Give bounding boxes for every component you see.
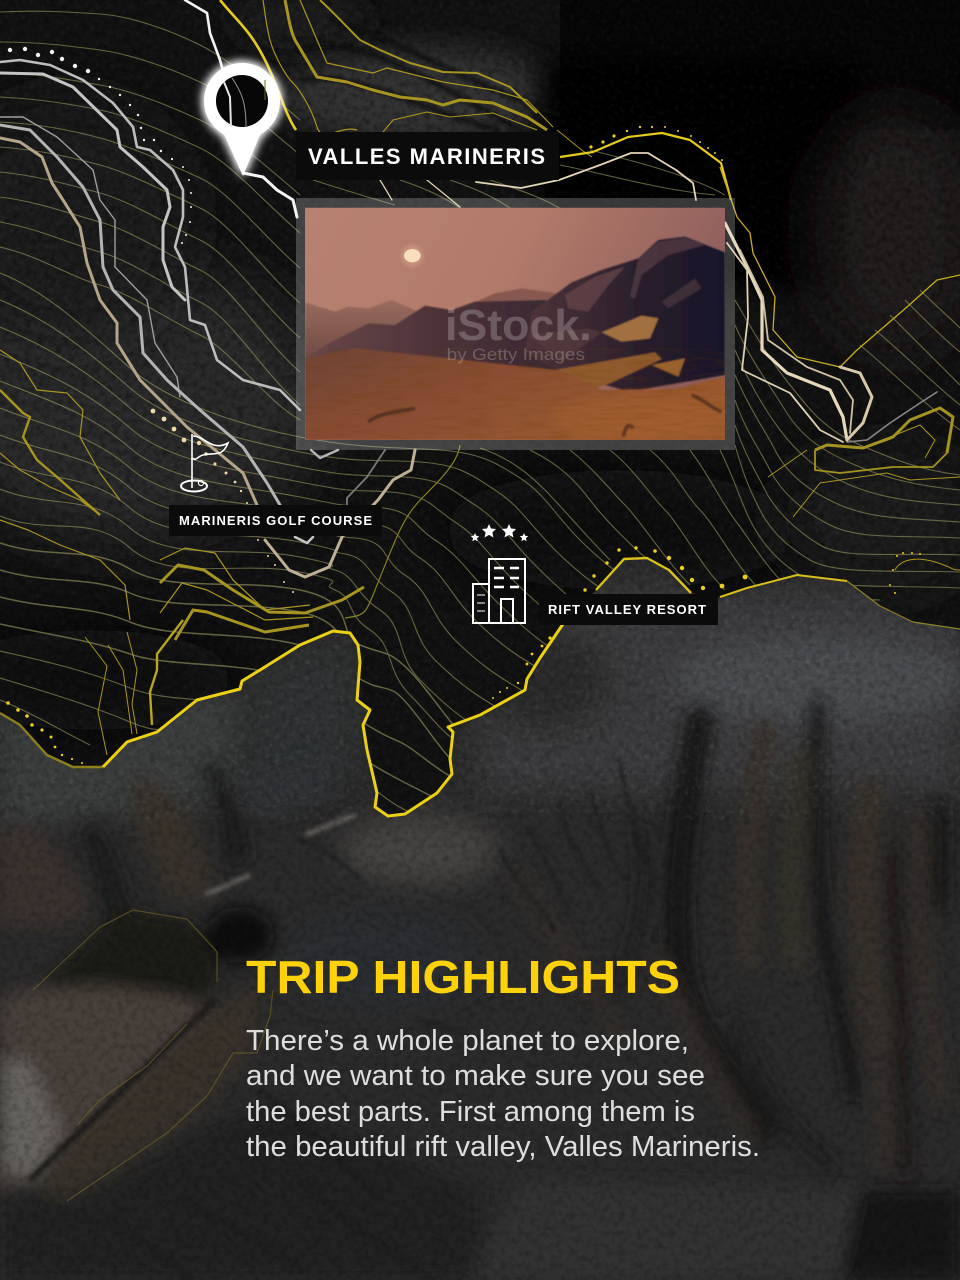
label: Valles Marineris: VALLES MARINERIS [308,144,545,169]
label: Rift Valley Resort [539,594,718,625]
body text: and we want to make sure you see [246,1060,705,1092]
route lines: white, grey and beige [0,0,937,577]
location pin [210,69,274,176]
label: Marineris Golf Course: MARINERIS GOLF COURSE [179,513,372,528]
dotted trails [6,47,921,764]
dark map background [0,0,960,830]
body text: the best parts. First among them is [246,1096,695,1128]
photo panel with frame: iStock. [445,301,592,350]
icon: golf flag [181,434,228,492]
main yellow terrain boundary [0,558,960,816]
yellow contour lines: lower left [85,548,364,755]
yellow contour lines: upper area [0,0,960,620]
photo panel with frame: by Getty Images [447,345,585,364]
label: Rift Valley Resort: RIFT VALLEY RESORT [548,602,706,617]
title: TRIP HIGHLIGHTS [246,951,680,1003]
icon: hotel with stars [471,524,528,623]
contour line network [0,11,960,815]
pin hole [216,75,268,127]
photo panel with frame [295,198,738,450]
body text: There’s a whole planet to explore, [246,1025,689,1057]
label: Marineris Golf Course [169,505,382,536]
label: Valles Marineris [296,132,559,180]
body text: the beautiful rift valley, Valles Marineris. [246,1131,760,1163]
body text [246,1025,760,1163]
terrain below the yellow boundary [0,540,960,1280]
